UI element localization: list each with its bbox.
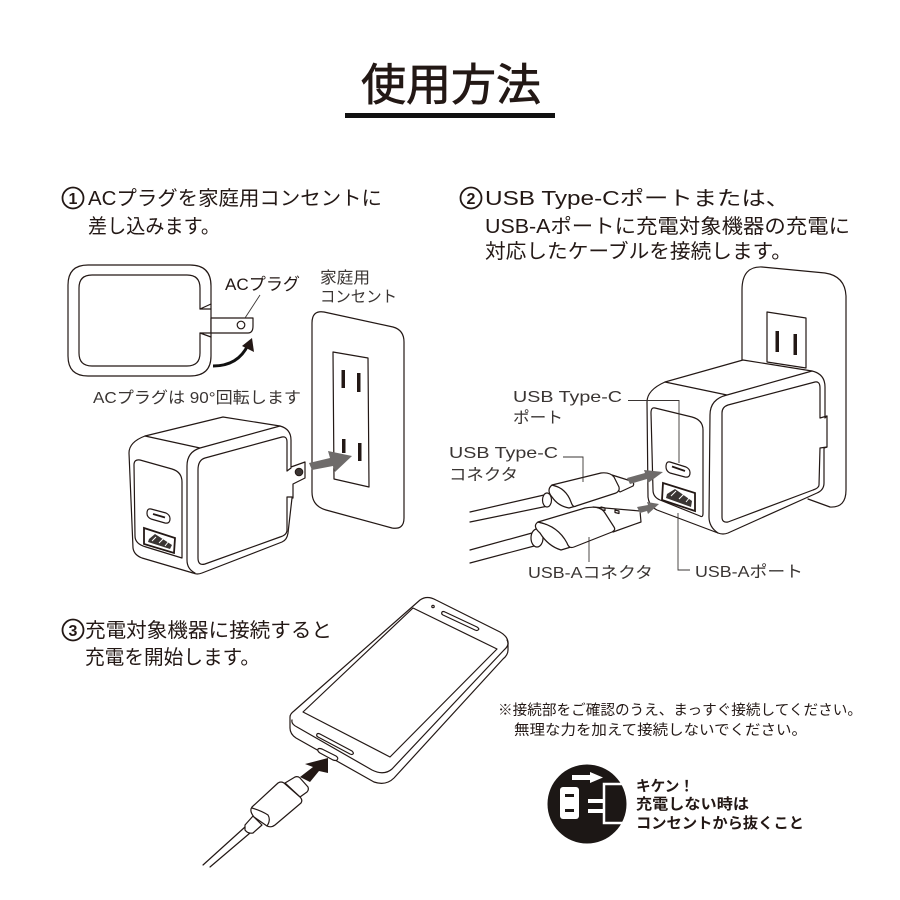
step 1 heading: 1 xyxy=(69,191,78,208)
label: USB-A connector xyxy=(528,537,653,582)
step 2 heading: USB Type-Cポートまたは、 xyxy=(485,187,790,210)
label: USB Type-C connector: USB Type-C xyxy=(449,445,558,462)
step 1 heading: 差し込みます。 xyxy=(88,215,220,238)
step 2 heading: 2 xyxy=(467,191,476,208)
label: USB-A port xyxy=(678,513,803,581)
step 3 heading: 充電を開始します。 xyxy=(85,646,260,669)
label: USB Type-C port xyxy=(513,389,679,463)
icon: unplug warning xyxy=(548,764,626,844)
note text: ※接続部をご確認のうえ、まっすぐ接続してください。 xyxy=(498,702,862,719)
screen xyxy=(303,608,497,757)
arrow: USB-C connector to port xyxy=(627,470,663,484)
label: USB-A port: USB-Aポート xyxy=(695,563,803,581)
step 3 heading xyxy=(62,619,332,669)
step 1 heading: ACプラグを家庭用コンセントに xyxy=(88,187,382,210)
label: USB Type-C connector xyxy=(449,445,583,484)
caption: plug rotates 90 degrees: ACプラグは 90°回転します xyxy=(93,389,301,407)
label: AC plug xyxy=(225,275,300,318)
illustration: flat charger with AC plug xyxy=(68,265,254,376)
step 2 heading: 対応したケーブルを接続します。 xyxy=(485,239,792,263)
icon: USB-A port xyxy=(144,528,175,553)
step 2 heading: USB-Aポートに充電対象機器の充電に xyxy=(485,215,850,238)
icon: plug blade hole xyxy=(295,468,303,476)
label: household outlet: 家庭用 xyxy=(320,269,370,287)
speaker top xyxy=(442,612,479,630)
label: USB Type-C port: ポート xyxy=(513,409,563,427)
arrow: connector to phone xyxy=(300,758,328,782)
step 1 heading xyxy=(62,187,382,238)
arrow: USB-A connector to port xyxy=(637,502,659,514)
illustration: charger with folded out plug xyxy=(129,417,305,574)
icon: AC plug blade xyxy=(211,318,253,333)
warning text: コンセントから抜くこと xyxy=(636,814,804,832)
warning text: キケン！ xyxy=(636,778,694,795)
step 3 heading: 3 xyxy=(69,623,78,640)
label: USB Type-C port: USB Type-C xyxy=(513,389,622,406)
label: AC plug: ACプラグ xyxy=(225,275,300,294)
step 3 heading: 充電対象機器に接続すると xyxy=(85,619,332,642)
step 2 heading xyxy=(460,187,850,263)
icon: USB-C port xyxy=(666,462,690,477)
illustration: charger with ports xyxy=(647,360,827,534)
illustration: wall plate behind charger xyxy=(742,267,846,507)
warning text xyxy=(636,778,804,832)
speaker bottom xyxy=(317,734,353,754)
illustration: smartphone xyxy=(290,598,508,783)
label: USB-A connector: USB-Aコネクタ xyxy=(528,564,653,582)
title: 使用方法 xyxy=(361,61,541,110)
note text xyxy=(498,702,862,739)
illustration: USB-A connector and cable xyxy=(470,507,641,563)
label: household outlet: コンセント xyxy=(320,289,397,306)
illustration: wall outlet xyxy=(312,312,404,528)
illustration: USB-C connector and cable xyxy=(470,473,634,522)
label: USB Type-C connector: コネクタ xyxy=(449,466,518,484)
illustration: phone cable connector xyxy=(203,777,308,867)
note text: 無理な力を加えて接続しないでください。 xyxy=(514,722,807,739)
port xyxy=(318,748,338,760)
arrow: plug into outlet xyxy=(309,451,352,472)
icon: USB-C port xyxy=(147,509,170,523)
warning text: 充電しない時は xyxy=(636,796,749,813)
arrow: plug rotation xyxy=(213,338,254,366)
label: household outlet xyxy=(320,269,397,306)
icon: USB-A port xyxy=(662,483,695,511)
